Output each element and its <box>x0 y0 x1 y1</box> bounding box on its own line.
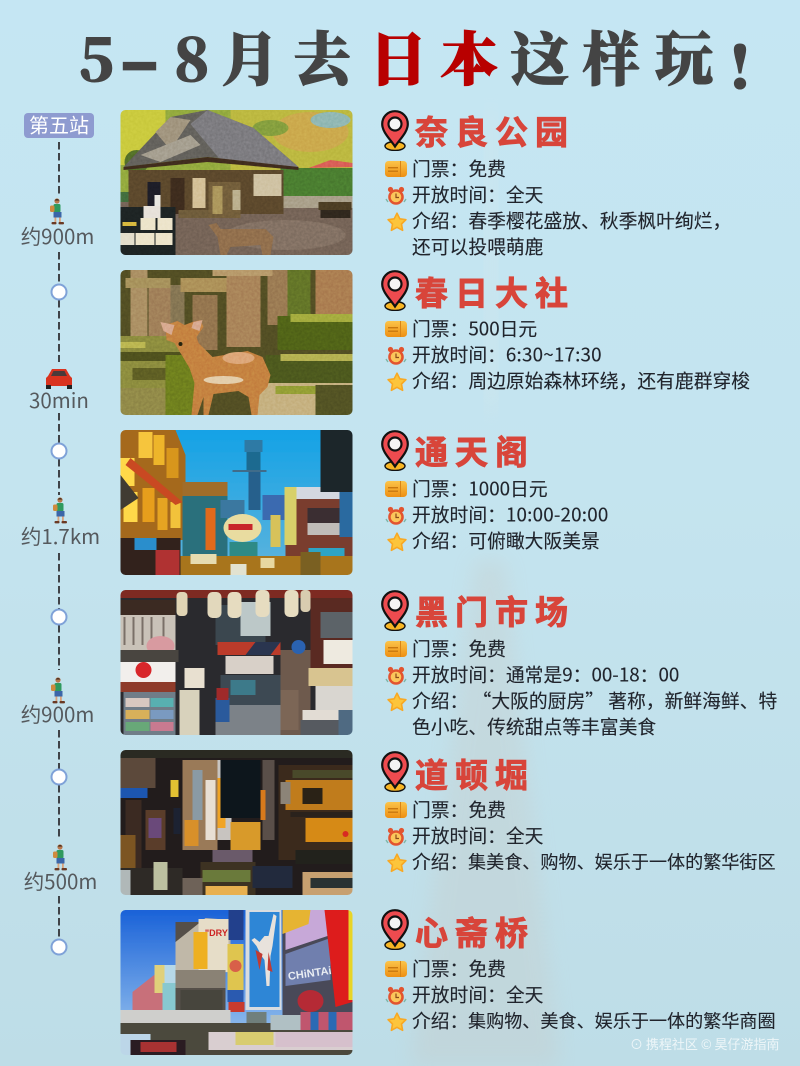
title: 5 <box>79 14 115 98</box>
stop: Nara Park: 开放时间：全天 <box>412 180 544 208</box>
stop: Kuromon Market: 门票：免费 <box>412 634 506 662</box>
stop: Shinsaibashi: 介绍： <box>412 1006 468 1034</box>
stop: Nara Park: 介绍：春季樱花盛放、秋季枫叶绚烂， <box>412 206 731 234</box>
stop: Kasuga Taisha <box>382 267 750 394</box>
stop: Tsutenkaku: 介绍：可俯瞰大阪美景 <box>412 526 600 554</box>
route timeline <box>21 110 100 954</box>
photo: Kasuga Taisha <box>120 270 352 415</box>
stop: Nara Park: 奈良公园 <box>415 106 575 154</box>
stop: Shinsaibashi: 集购物、美食、娱乐于一体的繁华商圈 <box>468 1008 776 1034</box>
stop: Nara Park <box>382 106 731 260</box>
stop: Tsutenkaku <box>382 426 608 554</box>
title <box>79 0 751 120</box>
stop: Nara Park: 门票：免费 <box>412 154 506 182</box>
title: 去 <box>293 13 356 97</box>
stop: Shinsaibashi: 心斋桥 <box>415 907 535 955</box>
stop: Shinsaibashi: 门票：免费 <box>412 954 506 982</box>
leg 4: 约900m <box>21 698 94 728</box>
stop: Kasuga Taisha: 开放时间：6:30~17:30 <box>412 340 602 368</box>
stop: Kuromon Market: 开放时间：通常是9：00-18：00 <box>412 660 679 688</box>
stop: Tsutenkaku: 开放时间：10:00-20:00 <box>412 500 608 528</box>
title: 日 <box>369 13 427 97</box>
start badge: 第五站 <box>29 110 89 138</box>
title: 月 <box>221 13 279 97</box>
photo: Kuromon Market <box>120 590 352 735</box>
title: 8 <box>174 14 210 98</box>
title: ! <box>729 21 751 105</box>
photo: Shinsaibashi: CHiNTAi <box>287 965 332 983</box>
stop: Dotonbori: 介绍： <box>412 848 468 874</box>
leg 5 <box>24 844 97 895</box>
stop: Dotonbori: 道顿堀 <box>415 749 535 797</box>
leg 1: 约900m <box>21 220 94 250</box>
title: 样 <box>582 13 640 97</box>
photo: Shinsaibashi: "DRY" <box>205 928 232 938</box>
stop: Dotonbori <box>382 749 776 874</box>
photo: Dotonbori <box>120 750 352 895</box>
photo: Shinsaibashi <box>120 910 352 1055</box>
leg 3 <box>21 497 100 550</box>
title: 这 <box>511 13 569 97</box>
photo: Nara Park <box>120 110 352 255</box>
stop: Dotonbori: 门票：免费 <box>412 796 506 822</box>
stop: Shinsaibashi <box>382 907 776 1034</box>
stop markers <box>52 284 66 954</box>
stop: Kuromon Market: 黑门市场 <box>415 586 575 634</box>
leg 1 <box>21 198 94 250</box>
title: 玩 <box>655 13 713 97</box>
leg 5: 约500m <box>24 865 97 895</box>
stop: Dotonbori: 开放时间：全天 <box>412 822 544 848</box>
stop: Kuromon Market <box>382 586 777 740</box>
stop: Kuromon Market: 介绍： “大阪的厨房” 著称，新鲜海鲜、特 <box>412 686 777 714</box>
dashed route line <box>58 142 60 939</box>
watermark: ⊙ 携程社区 © 昊仔游指南 <box>630 1034 780 1053</box>
stop: Tsutenkaku: 通天阁 <box>415 426 535 474</box>
leg 2: car: 30min <box>29 384 89 414</box>
title: 本 <box>440 13 498 97</box>
stop: Nara Park: 还可以投喂萌鹿 <box>412 232 543 260</box>
leg 2: car <box>29 369 89 414</box>
leg 3: 约1.7km <box>21 520 100 550</box>
stop: Kuromon Market: 色小吃、传统甜点等丰富美食 <box>412 712 656 740</box>
stop: Shinsaibashi: 开放时间：全天 <box>412 980 544 1008</box>
stop: Kasuga Taisha: 介绍：周边原始森林环绕，还有鹿群穿梭 <box>412 366 750 394</box>
stop: Kasuga Taisha: 门票：500日元 <box>412 314 537 342</box>
photo: Tsutenkaku <box>120 430 352 575</box>
leg 4 <box>21 677 94 728</box>
stop: Kasuga Taisha: 春日大社 <box>415 267 575 315</box>
stop: Tsutenkaku: 门票：1000日元 <box>412 474 548 502</box>
stop: Dotonbori: 集美食、购物、娱乐于一体的繁华街区 <box>468 848 776 874</box>
